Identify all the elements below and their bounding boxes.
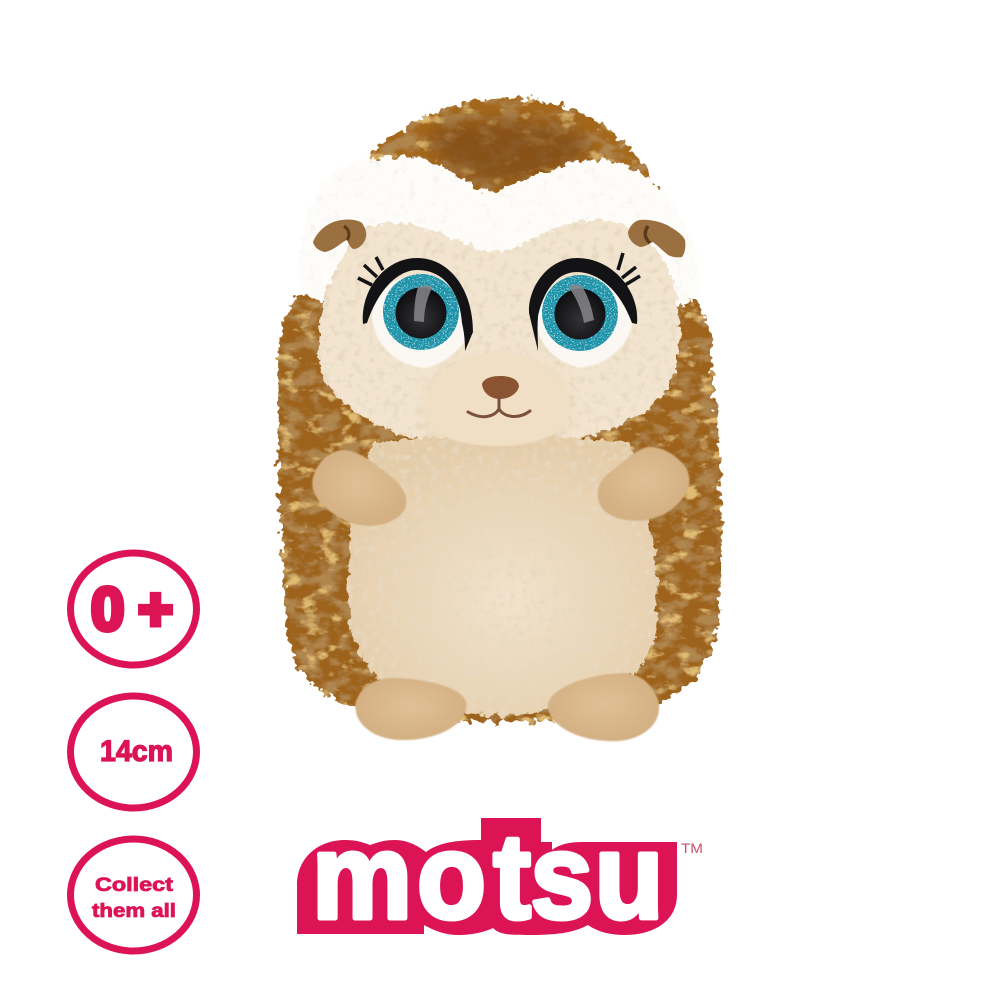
badge: collect them all: Collect — [95, 875, 174, 896]
plush hedgehog toy — [278, 98, 722, 741]
muzzle — [425, 353, 570, 450]
motsu logo — [297, 808, 703, 944]
left eye — [358, 257, 473, 368]
hedgehog brown spiky body — [278, 98, 722, 722]
badge: age 0+: 0+ — [91, 576, 173, 643]
cream face — [318, 220, 679, 447]
left arm — [312, 450, 406, 526]
trademark: TM — [681, 840, 703, 856]
badge: age 0+ — [70, 553, 196, 665]
badge: collect them all: them all — [92, 901, 176, 922]
right arm — [598, 447, 689, 521]
left ear — [313, 220, 366, 252]
right foot — [548, 673, 659, 741]
cream belly — [348, 435, 657, 716]
left foot — [355, 678, 466, 740]
right eye — [529, 253, 640, 368]
dark crown patch — [429, 120, 590, 185]
logo wordmark: motsu — [312, 808, 663, 944]
white forehead fur band — [299, 156, 700, 308]
badge: size 14cm: 14cm — [100, 735, 173, 768]
nose — [482, 376, 519, 399]
right ear — [628, 220, 685, 257]
badge: collect them all — [70, 839, 196, 951]
mouth — [468, 398, 530, 417]
badge: size 14cm — [70, 696, 196, 808]
logo pink backing — [297, 818, 677, 935]
